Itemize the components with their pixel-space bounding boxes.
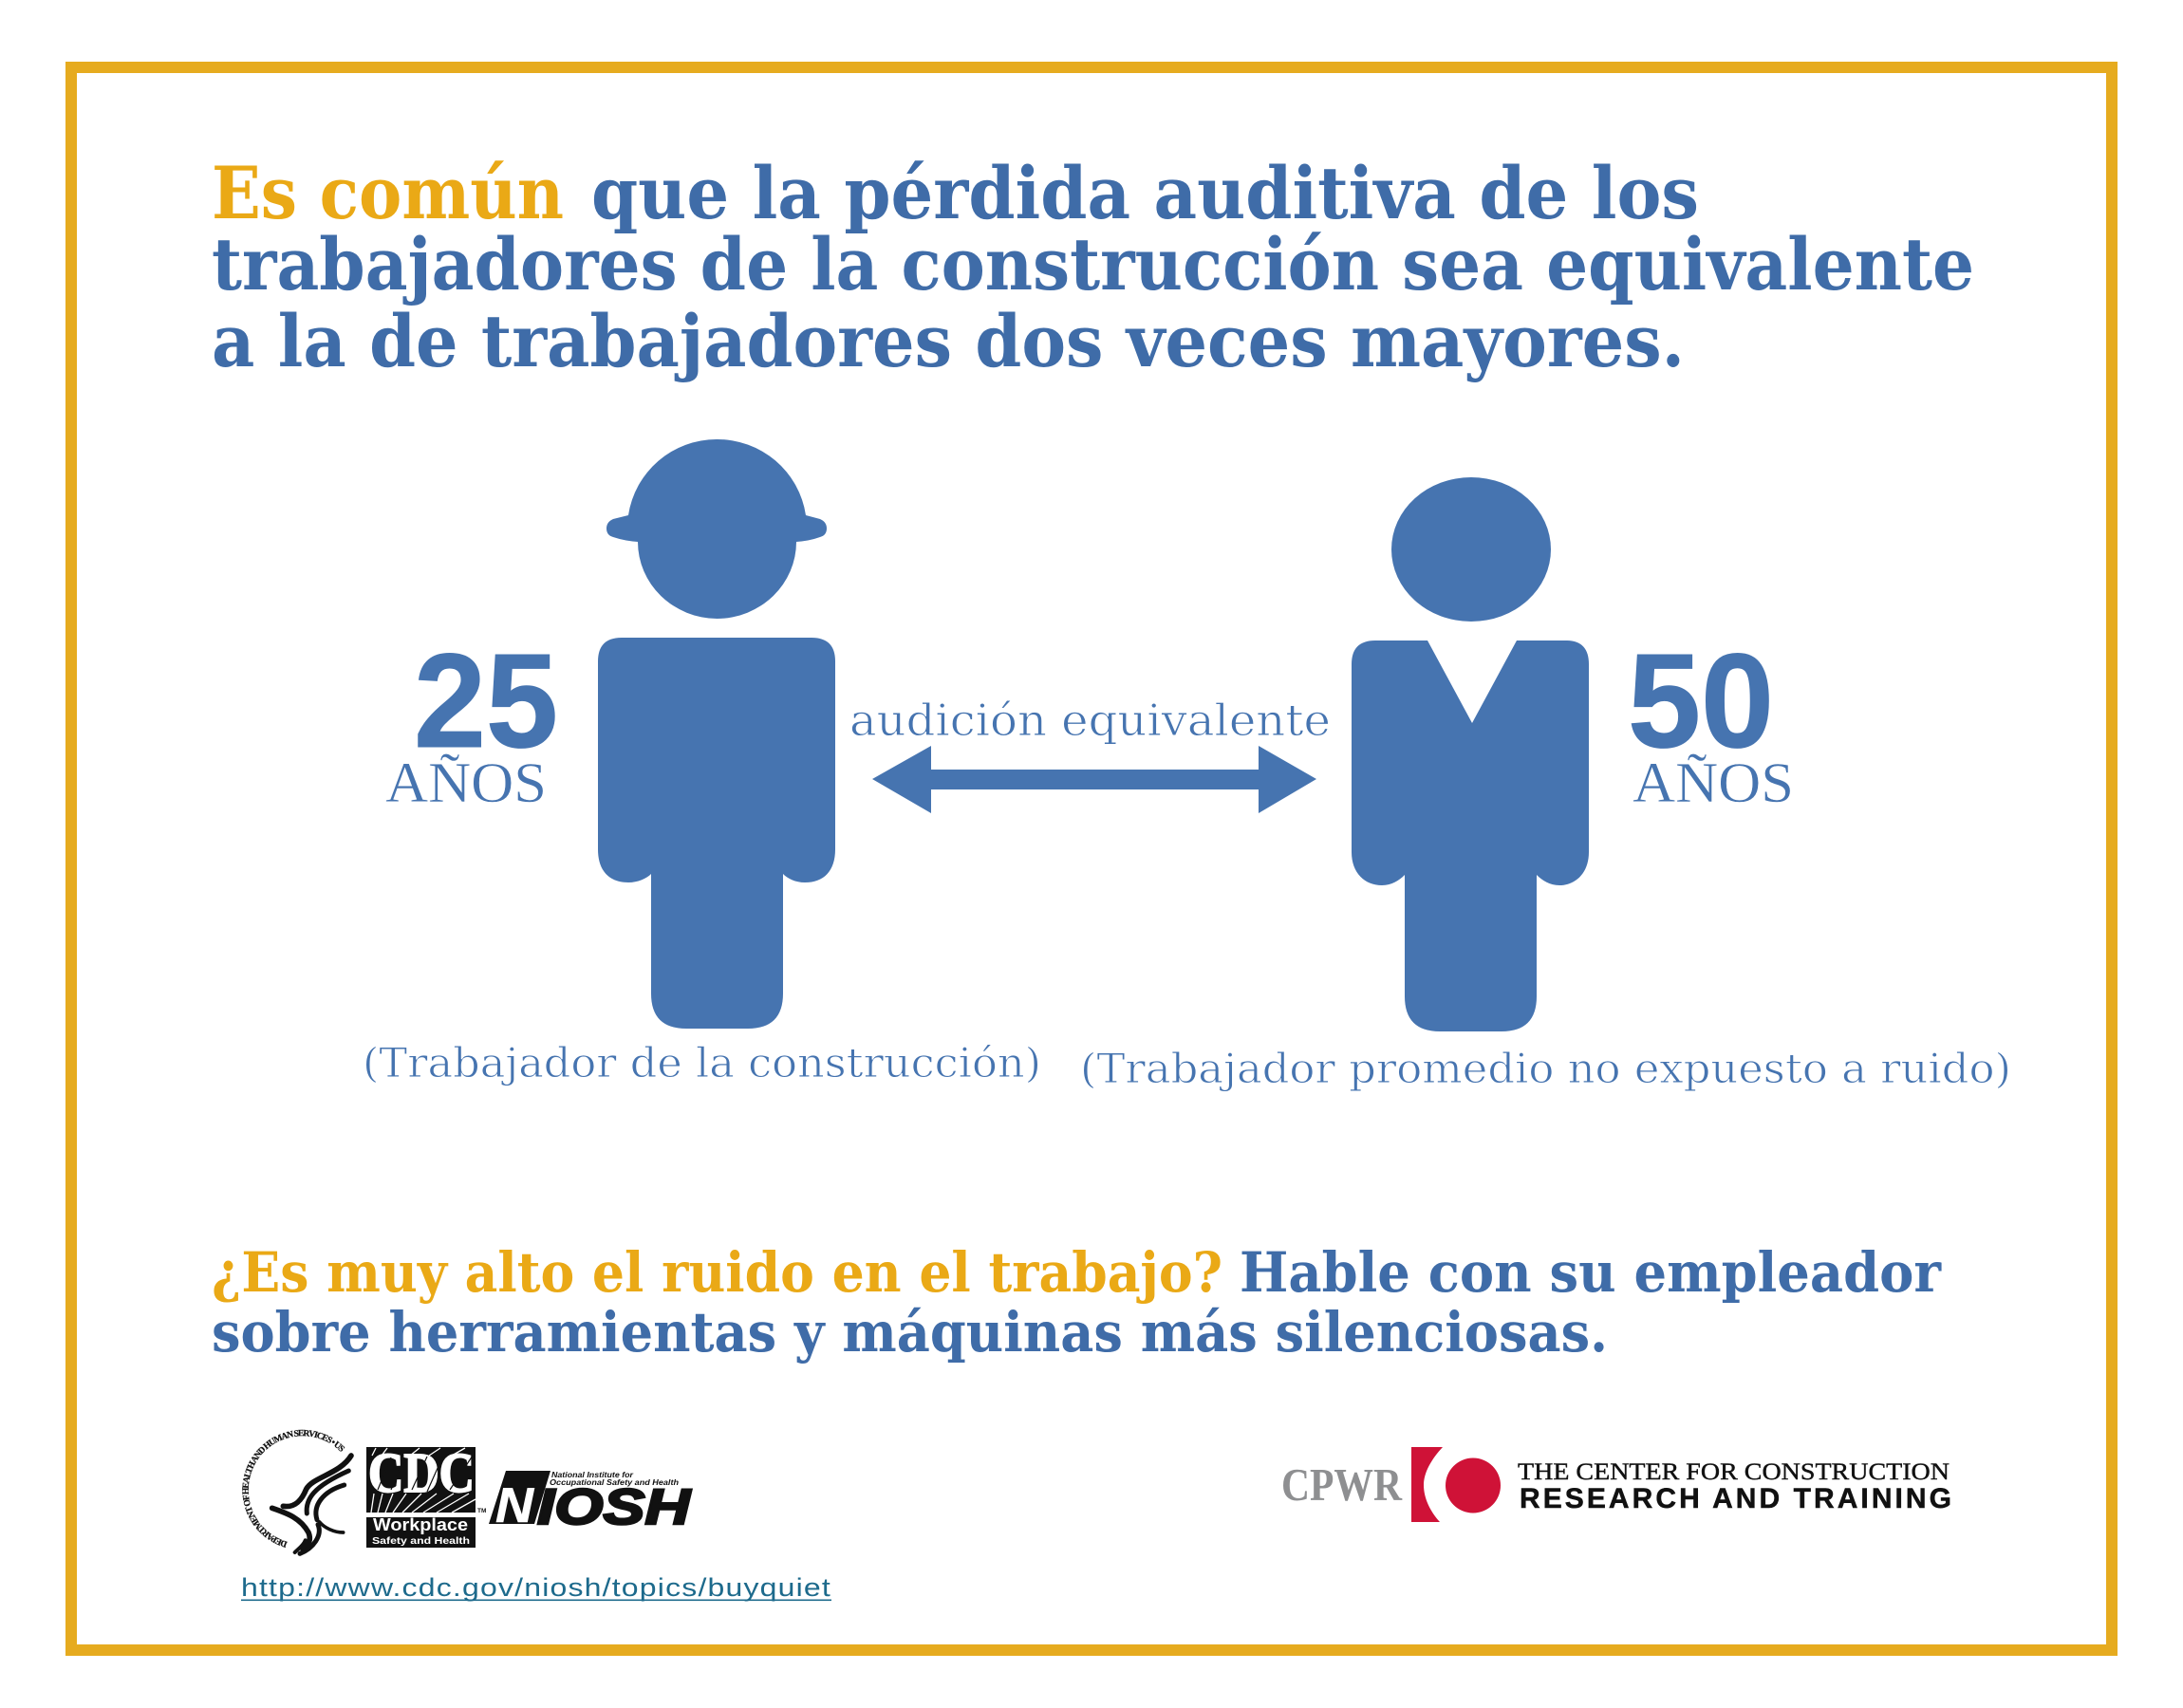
logo: NIOSH: IOSH (537, 1479, 692, 1535)
logo: NIOSH: N (495, 1478, 535, 1533)
logo: CDC Workplace Safety and Health: TM (477, 1508, 486, 1514)
call to action: sobre herramientas y máquinas más silenciosas. (212, 1300, 1608, 1365)
age 25: 25 (414, 625, 558, 775)
icon: worker body (598, 638, 835, 1029)
call to action: ¿Es muy alto el ruido en el trabajo? (212, 1240, 1222, 1305)
logo: NIOSH (489, 1470, 692, 1535)
logo: CPWR (1281, 1447, 1951, 1522)
logo: NIOSH: National Institute for (551, 1470, 634, 1479)
figure: average worker (1352, 477, 1589, 1031)
age 50: 50 (1628, 625, 1774, 775)
label: equivalent hearing: audición equivalente (849, 695, 1331, 746)
caption: average worker: (Trabajador promedio no expuesto a ruido) (1080, 1046, 2011, 1093)
logo: NIOSH: Occupational Safety and Health (550, 1477, 679, 1487)
caption: construction worker: (Trabajador de la construcción) (363, 1040, 1041, 1087)
age 25 (385, 625, 558, 814)
title: Es común (212, 151, 564, 235)
logo: CPWR: CPWR (1281, 1458, 1403, 1511)
age 25: AÑOS (385, 752, 547, 814)
icon: suited body (1352, 640, 1589, 1031)
call to action (212, 1240, 1942, 1365)
logo: CPWR: RESEARCH AND TRAINING (1520, 1483, 1951, 1514)
title: que la pérdida auditiva de los (591, 151, 1699, 235)
icon: hard hat head (606, 439, 827, 619)
logo: CPWR: THE CENTER FOR CONSTRUCTION (1518, 1459, 1950, 1485)
age 50: AÑOS (1633, 752, 1794, 814)
title: a la de trabajadores dos veces mayores. (212, 299, 1685, 383)
figure: construction worker (598, 439, 835, 1029)
logo: CDC Workplace Safety and Health: Workplace (373, 1515, 468, 1534)
logo: CDC Workplace Safety and Health (366, 1441, 486, 1548)
logo: HHS eagle seal (242, 1429, 354, 1556)
title (212, 151, 1974, 383)
logo: CDC Workplace Safety and Health: Safety and Health (372, 1535, 470, 1547)
double arrow (872, 746, 1316, 813)
web address: http://www.cdc.gov/niosh/topics/buyquiet (241, 1573, 831, 1602)
logo: HHS eagle seal: DEPARTMENT OF HEALTH AND HUMAN SERVICES • USA (242, 1429, 345, 1549)
call to action: Hable con su empleador (1240, 1240, 1942, 1305)
logo: CDC Workplace Safety and Health: CDC (368, 1441, 475, 1504)
title: trabajadores de la construcción sea equivalente (212, 222, 1974, 306)
icon: head (1391, 477, 1551, 622)
